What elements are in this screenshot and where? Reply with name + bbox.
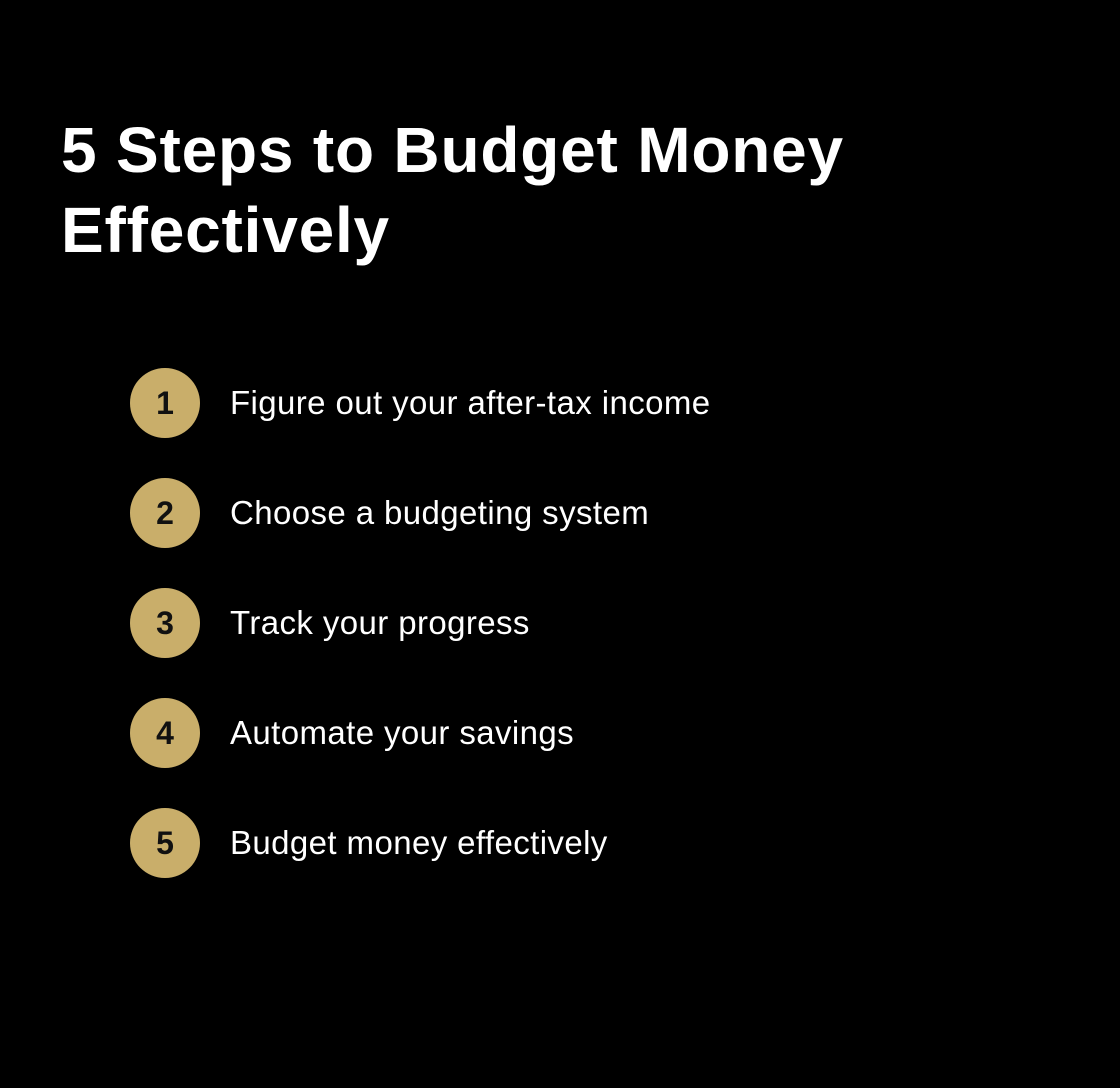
step 3: Track your progress (230, 604, 530, 641)
step 4: Automate your savings (230, 714, 574, 751)
step 5: 5 (156, 825, 174, 861)
step 5: Budget money effectively (230, 824, 608, 861)
step 2: Choose a budgeting system (230, 494, 649, 531)
step 4: 4 (156, 715, 174, 751)
step 1: Figure out your after-tax income (230, 384, 711, 421)
step 2 (130, 478, 649, 548)
step 1: 1 (156, 385, 174, 421)
step 3: 3 (156, 605, 174, 641)
title (61, 114, 844, 266)
step 1 (130, 368, 711, 438)
step 2: 2 (156, 495, 174, 531)
title: 5 Steps to Budget Money (61, 114, 844, 186)
step 3 (130, 588, 530, 658)
title: Effectively (61, 194, 390, 266)
step 5 (130, 808, 608, 878)
step 4 (130, 698, 574, 768)
